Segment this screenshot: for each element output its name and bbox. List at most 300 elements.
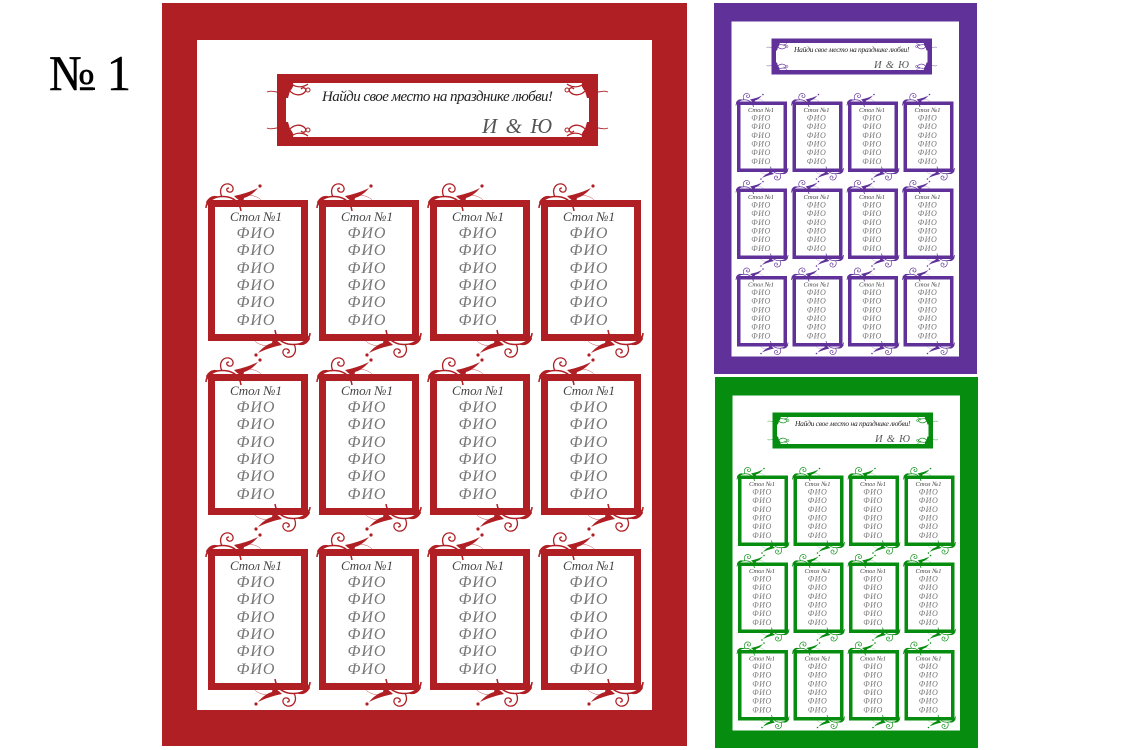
- card: green row 2 table 1: ФИО: [752, 583, 772, 592]
- number label: № 1: [49, 45, 131, 101]
- card: red row 1 table 2: ФИО: [348, 242, 386, 259]
- card: green row 3 table 1: ФИО: [752, 696, 772, 706]
- card: red row 2 table 2: ФИО: [348, 486, 386, 503]
- card: purple row 1 table 3: [847, 93, 899, 180]
- card: purple row 3 table 2: ФИО: [807, 288, 826, 297]
- card: green row 3 table 3: ФИО: [863, 670, 883, 680]
- card: green row 2 table 4: ФИО: [919, 592, 938, 601]
- card: purple row 3 table 4: ФИО: [918, 322, 937, 332]
- card: green row 3 table 4: ФИО: [919, 696, 938, 706]
- card: red row 2 table 3: ФИО: [459, 434, 497, 451]
- card: purple row 1 table 1: ФИО: [751, 122, 771, 131]
- card: purple row 1 table 4: ФИО: [918, 140, 937, 148]
- card: red row 1 table 3: ФИО: [459, 260, 497, 277]
- card: green row 3 table 3: [848, 642, 900, 729]
- banner: red heading: [267, 78, 608, 142]
- banner: purple heading: [766, 41, 937, 72]
- card: purple row 3 table 3: ФИО: [862, 288, 882, 297]
- card: green row 3 table 2: ФИО: [808, 696, 827, 706]
- card: red row 1 table 4: ФИО: [570, 312, 608, 329]
- card: green row 1 table 1: ФИО: [752, 514, 772, 522]
- card: green row 2 table 3: ФИО: [863, 583, 883, 592]
- card: red row 1 table 4: Стол №1: [563, 209, 615, 224]
- card: red row 2 table 3: ФИО: [459, 486, 497, 503]
- card: red row 1 table 1: ФИО: [237, 277, 275, 294]
- card: green row 1 table 3: [848, 467, 900, 554]
- card: red row 1 table 3: ФИО: [459, 312, 497, 329]
- card: purple row 3 table 1: ФИО: [751, 332, 771, 340]
- card: red row 1 table 1: ФИО: [237, 294, 275, 311]
- card: purple row 3 table 2: [792, 268, 844, 355]
- card: purple row 3 table 3: ФИО: [862, 296, 882, 306]
- card: purple row 3 table 3: ФИО: [862, 306, 882, 314]
- card: purple row 3 table 4: ФИО: [918, 288, 937, 297]
- card: purple row 1 table 2: ФИО: [807, 131, 826, 140]
- banner: green heading: [768, 415, 938, 446]
- banner: green heading: И & Ю: [874, 434, 910, 445]
- card: red row 3 table 4: ФИО: [570, 643, 608, 660]
- card: red row 1 table 1: [206, 184, 310, 357]
- card: purple row 1 table 3: ФИО: [862, 114, 882, 122]
- card: green row 1 table 1: [737, 467, 789, 554]
- card: red row 2 table 1: ФИО: [237, 416, 275, 433]
- card: red row 2 table 3: Стол №1: [452, 383, 504, 398]
- card: red row 3 table 3: Стол №1: [452, 558, 504, 573]
- card: red row 3 table 4: ФИО: [570, 626, 608, 643]
- card: purple row 3 table 3: [847, 268, 899, 355]
- card: purple row 3 table 1: ФИО: [751, 314, 771, 323]
- card: green row 2 table 2: ФИО: [808, 618, 827, 627]
- card: green row 2 table 3: ФИО: [863, 618, 883, 627]
- card: green row 1 table 2: ФИО: [808, 496, 827, 505]
- card: green row 3 table 1: ФИО: [752, 662, 772, 671]
- card: red row 3 table 3: ФИО: [459, 661, 497, 678]
- banner: purple heading: И & Ю: [873, 60, 909, 71]
- card: purple row 2 table 4: Стол №1: [914, 194, 941, 201]
- card: purple row 1 table 1: ФИО: [751, 114, 771, 122]
- card: purple row 2 table 1: ФИО: [751, 226, 771, 236]
- card: red row 2 table 2: ФИО: [348, 434, 386, 451]
- card: green row 3 table 2: ФИО: [808, 688, 827, 697]
- card: purple row 2 table 3: ФИО: [862, 218, 882, 227]
- banner: purple heading: Найди свое место на празднике любви!: [793, 45, 910, 54]
- card: green row 3 table 3: ФИО: [863, 662, 883, 671]
- card: green row 1 table 4: ФИО: [919, 514, 938, 522]
- card: green row 1 table 4: ФИО: [919, 496, 938, 505]
- card: green row 3 table 2: ФИО: [808, 662, 827, 671]
- card: purple row 2 table 2: ФИО: [807, 226, 826, 236]
- card: green row 2 table 4: ФИО: [919, 609, 938, 618]
- card: red row 3 table 3: ФИО: [459, 591, 497, 608]
- card: red row 2 table 1: ФИО: [237, 434, 275, 451]
- card: green row 3 table 3: ФИО: [863, 680, 883, 688]
- card: red row 2 table 4: ФИО: [570, 468, 608, 485]
- card: green row 2 table 1: [737, 554, 789, 641]
- card: green row 1 table 1: ФИО: [752, 522, 772, 531]
- banner: green heading: Найди свое место на празднике любви!: [794, 419, 911, 428]
- card: green row 2 table 1: ФИО: [752, 618, 772, 627]
- card: red row 2 table 1: ФИО: [237, 468, 275, 485]
- card: red row 1 table 3: Стол №1: [452, 209, 504, 224]
- card: purple row 3 table 3: Стол №1: [859, 282, 885, 288]
- card: green row 3 table 4: ФИО: [919, 680, 938, 688]
- card: green row 2 table 3: ФИО: [863, 600, 883, 610]
- card: purple row 2 table 2: [792, 180, 844, 267]
- card: green row 3 table 4: ФИО: [919, 662, 938, 671]
- card: green row 2 table 2: ФИО: [808, 609, 827, 618]
- card: green row 2 table 2: [792, 554, 844, 641]
- card: red row 1 table 3: ФИО: [459, 294, 497, 311]
- card: purple row 1 table 2: Стол №1: [803, 107, 830, 114]
- card: green row 1 table 3: ФИО: [863, 531, 883, 540]
- card: red row 3 table 3: ФИО: [459, 609, 497, 626]
- card: red row 1 table 1: Стол №1: [230, 209, 282, 224]
- card: green row 1 table 3: ФИО: [863, 505, 883, 514]
- card: purple row 2 table 2: ФИО: [807, 209, 826, 218]
- card: red row 1 table 1: ФИО: [237, 242, 275, 259]
- card: red row 2 table 3: [428, 358, 532, 531]
- card: green row 2 table 3: ФИО: [863, 592, 883, 601]
- card: red row 3 table 1: Стол №1: [230, 558, 282, 573]
- card: green row 3 table 2: ФИО: [808, 680, 827, 688]
- card: green row 1 table 1: ФИО: [752, 505, 772, 514]
- card: red row 3 table 2: ФИО: [348, 609, 386, 626]
- banner: red heading: И & Ю: [481, 114, 552, 138]
- card: green row 3 table 3: Стол №1: [860, 656, 886, 662]
- card: green row 3 table 2: [792, 642, 844, 729]
- card: purple row 1 table 4: ФИО: [918, 157, 937, 166]
- card: green row 2 table 1: ФИО: [752, 609, 772, 618]
- card: purple row 1 table 4: ФИО: [918, 131, 937, 140]
- card: purple row 2 table 1: ФИО: [751, 200, 771, 210]
- card: green row 3 table 1: [737, 642, 789, 729]
- card: red row 2 table 4: ФИО: [570, 451, 608, 468]
- card: purple row 3 table 3: ФИО: [862, 332, 882, 340]
- card: purple row 1 table 3: ФИО: [862, 140, 882, 148]
- card: purple row 1 table 3: Стол №1: [859, 107, 885, 114]
- card: red row 3 table 4: ФИО: [570, 591, 608, 608]
- card: purple row 1 table 3: ФИО: [862, 122, 882, 131]
- card: red row 3 table 3: ФИО: [459, 643, 497, 660]
- card: red row 2 table 3: ФИО: [459, 451, 497, 468]
- card: purple row 3 table 1: ФИО: [751, 306, 771, 314]
- card: purple row 2 table 2: ФИО: [807, 235, 826, 244]
- card: red row 3 table 2: [317, 533, 421, 706]
- card: red row 3 table 2: Стол №1: [341, 558, 393, 573]
- card: green row 2 table 3: ФИО: [863, 574, 883, 584]
- card: purple row 2 table 1: [736, 180, 788, 267]
- card: red row 3 table 2: ФИО: [348, 643, 386, 660]
- card: green row 1 table 2: ФИО: [808, 531, 827, 540]
- card: green row 1 table 4: ФИО: [919, 505, 938, 514]
- card: green row 2 table 4: ФИО: [919, 583, 938, 592]
- card: purple row 1 table 1: [736, 93, 788, 180]
- card: green row 3 table 4: ФИО: [919, 688, 938, 697]
- card: green row 3 table 3: ФИО: [863, 688, 883, 697]
- card: purple row 3 table 1: ФИО: [751, 322, 771, 332]
- card: purple row 3 table 2: Стол №1: [803, 282, 830, 288]
- card: purple row 2 table 3: Стол №1: [859, 194, 885, 201]
- card: green row 3 table 3: ФИО: [863, 696, 883, 706]
- panel: red seating chart: [162, 3, 687, 746]
- card: purple row 2 table 4: [902, 180, 954, 267]
- card: purple row 2 table 4: ФИО: [918, 235, 937, 244]
- card: green row 1 table 2: ФИО: [808, 514, 827, 522]
- card: purple row 2 table 4: ФИО: [918, 218, 937, 227]
- card: green row 1 table 2: ФИО: [808, 505, 827, 514]
- card: red row 1 table 1: ФИО: [237, 312, 275, 329]
- card: green row 3 table 4: [904, 642, 956, 729]
- card: purple row 2 table 1: ФИО: [751, 218, 771, 227]
- card: green row 1 table 4: ФИО: [919, 522, 938, 531]
- card: green row 2 table 2: Стол №1: [804, 568, 831, 575]
- banner: red heading: Найди свое место на празднике любви!: [321, 89, 553, 105]
- card: red row 2 table 3: ФИО: [459, 416, 497, 433]
- card: green row 2 table 1: ФИО: [752, 574, 772, 584]
- card: purple row 3 table 1: [736, 268, 788, 355]
- card: green row 1 table 3: ФИО: [863, 496, 883, 505]
- card: green row 1 table 2: Стол №1: [804, 481, 831, 488]
- card: red row 1 table 3: [428, 184, 532, 357]
- card: red row 1 table 2: ФИО: [348, 294, 386, 311]
- card: purple row 2 table 3: ФИО: [862, 226, 882, 236]
- card: green row 1 table 4: ФИО: [919, 488, 938, 496]
- card: purple row 1 table 3: ФИО: [862, 148, 882, 157]
- panel: purple seating chart: [714, 3, 977, 374]
- card: red row 3 table 3: ФИО: [459, 626, 497, 643]
- card: red row 3 table 4: Стол №1: [563, 558, 615, 573]
- card: purple row 1 table 2: ФИО: [807, 122, 826, 131]
- card: purple row 2 table 4: ФИО: [918, 200, 937, 210]
- card: green row 2 table 1: ФИО: [752, 592, 772, 601]
- card: green row 2 table 2: ФИО: [808, 583, 827, 592]
- card: purple row 2 table 2: Стол №1: [803, 194, 830, 201]
- card: red row 1 table 2: Стол №1: [341, 209, 393, 224]
- card: red row 3 table 3: ФИО: [459, 574, 497, 591]
- card: green row 2 table 2: ФИО: [808, 574, 827, 584]
- card: purple row 2 table 3: ФИО: [862, 244, 882, 253]
- card: red row 3 table 2: ФИО: [348, 574, 386, 591]
- card: red row 2 table 3: ФИО: [459, 468, 497, 485]
- card: red row 2 table 3: ФИО: [459, 399, 497, 416]
- card: green row 1 table 2: ФИО: [808, 522, 827, 531]
- card: red row 1 table 3: ФИО: [459, 277, 497, 294]
- card: purple row 1 table 2: ФИО: [807, 148, 826, 157]
- card: red row 1 table 2: ФИО: [348, 277, 386, 294]
- card: red row 3 table 2: ФИО: [348, 591, 386, 608]
- card: red row 2 table 1: Стол №1: [230, 383, 282, 398]
- card: purple row 3 table 3: ФИО: [862, 314, 882, 323]
- card: purple row 2 table 1: Стол №1: [748, 194, 774, 201]
- card: green row 1 table 3: Стол №1: [860, 481, 886, 488]
- card: red row 1 table 2: ФИО: [348, 312, 386, 329]
- card: red row 1 table 3: ФИО: [459, 242, 497, 259]
- card: red row 3 table 1: ФИО: [237, 643, 275, 660]
- card: purple row 1 table 4: ФИО: [918, 114, 937, 122]
- card: purple row 1 table 1: ФИО: [751, 157, 771, 166]
- card: green row 2 table 3: ФИО: [863, 609, 883, 618]
- card: red row 3 table 1: [206, 533, 310, 706]
- card: red row 2 table 2: Стол №1: [341, 383, 393, 398]
- card: purple row 2 table 3: ФИО: [862, 235, 882, 244]
- card: red row 3 table 1: ФИО: [237, 661, 275, 678]
- card: green row 2 table 1: ФИО: [752, 600, 772, 610]
- card: red row 1 table 4: ФИО: [570, 277, 608, 294]
- card: green row 1 table 3: ФИО: [863, 488, 883, 496]
- card: purple row 1 table 2: [792, 93, 844, 180]
- card: green row 2 table 2: ФИО: [808, 600, 827, 610]
- card: green row 2 table 3: Стол №1: [860, 568, 886, 575]
- card: green row 1 table 3: ФИО: [863, 514, 883, 522]
- card: green row 2 table 1: Стол №1: [749, 568, 775, 575]
- card: red row 1 table 3: ФИО: [459, 225, 497, 242]
- card: purple row 2 table 2: ФИО: [807, 218, 826, 227]
- card: purple row 2 table 2: ФИО: [807, 244, 826, 253]
- card: red row 1 table 1: ФИО: [237, 260, 275, 277]
- card: green row 3 table 4: ФИО: [919, 670, 938, 680]
- card: red row 3 table 2: ФИО: [348, 626, 386, 643]
- card: red row 1 table 1: ФИО: [237, 225, 275, 242]
- card: red row 1 table 4: ФИО: [570, 294, 608, 311]
- card: purple row 3 table 2: ФИО: [807, 314, 826, 323]
- card: purple row 3 table 3: ФИО: [862, 322, 882, 332]
- card: green row 2 table 4: ФИО: [919, 600, 938, 610]
- card: purple row 3 table 1: ФИО: [751, 288, 771, 297]
- card: red row 3 table 4: ФИО: [570, 609, 608, 626]
- card: purple row 1 table 2: ФИО: [807, 157, 826, 166]
- card: red row 3 table 4: [539, 533, 643, 706]
- card: red row 1 table 4: ФИО: [570, 242, 608, 259]
- card: red row 2 table 4: ФИО: [570, 399, 608, 416]
- card: red row 3 table 3: [428, 533, 532, 706]
- panel: green seating chart: [715, 377, 978, 748]
- card: red row 2 table 2: ФИО: [348, 451, 386, 468]
- card: green row 3 table 1: Стол №1: [749, 656, 775, 662]
- card: purple row 3 table 4: [902, 268, 954, 355]
- card: purple row 3 table 4: ФИО: [918, 296, 937, 306]
- card: purple row 1 table 4: ФИО: [918, 148, 937, 157]
- card: green row 2 table 4: ФИО: [919, 618, 938, 627]
- card: purple row 2 table 1: ФИО: [751, 209, 771, 218]
- card: purple row 1 table 4: [902, 93, 954, 180]
- card: green row 1 table 1: ФИО: [752, 496, 772, 505]
- card: purple row 2 table 4: ФИО: [918, 226, 937, 236]
- card: green row 3 table 1: ФИО: [752, 706, 772, 714]
- card: green row 3 table 4: ФИО: [919, 706, 938, 714]
- card: green row 2 table 3: [848, 554, 900, 641]
- card: purple row 3 table 1: Стол №1: [748, 282, 774, 288]
- card: green row 3 table 2: ФИО: [808, 670, 827, 680]
- card: purple row 3 table 4: ФИО: [918, 332, 937, 340]
- card: green row 3 table 1: ФИО: [752, 680, 772, 688]
- card: red row 2 table 4: [539, 358, 643, 531]
- card: red row 2 table 1: [206, 358, 310, 531]
- card: purple row 1 table 4: ФИО: [918, 122, 937, 131]
- card: green row 2 table 4: ФИО: [919, 574, 938, 584]
- card: purple row 2 table 1: ФИО: [751, 244, 771, 253]
- card: purple row 2 table 3: ФИО: [862, 209, 882, 218]
- card: green row 1 table 3: ФИО: [863, 522, 883, 531]
- card: red row 3 table 1: ФИО: [237, 609, 275, 626]
- card: purple row 1 table 1: Стол №1: [748, 107, 774, 114]
- card: purple row 1 table 1: ФИО: [751, 131, 771, 140]
- card: purple row 1 table 4: Стол №1: [914, 107, 941, 114]
- card: red row 3 table 4: ФИО: [570, 661, 608, 678]
- card: red row 3 table 4: ФИО: [570, 574, 608, 591]
- card: green row 1 table 1: Стол №1: [749, 481, 775, 488]
- card: purple row 2 table 3: ФИО: [862, 200, 882, 210]
- card: green row 3 table 4: Стол №1: [915, 656, 942, 662]
- card: purple row 3 table 2: ФИО: [807, 296, 826, 306]
- card: purple row 2 table 2: ФИО: [807, 200, 826, 210]
- card: purple row 3 table 4: ФИО: [918, 314, 937, 323]
- card: red row 1 table 2: ФИО: [348, 225, 386, 242]
- card: red row 2 table 2: ФИО: [348, 468, 386, 485]
- card: green row 1 table 1: ФИО: [752, 531, 772, 540]
- card: red row 2 table 2: [317, 358, 421, 531]
- card: red row 3 table 2: ФИО: [348, 661, 386, 678]
- card: green row 1 table 2: ФИО: [808, 488, 827, 496]
- card: red row 3 table 1: ФИО: [237, 626, 275, 643]
- card: purple row 3 table 4: ФИО: [918, 306, 937, 314]
- card: red row 3 table 1: ФИО: [237, 591, 275, 608]
- card: red row 1 table 2: ФИО: [348, 260, 386, 277]
- card: purple row 3 table 4: Стол №1: [914, 282, 941, 288]
- card: purple row 3 table 2: ФИО: [807, 332, 826, 340]
- card: red row 2 table 4: ФИО: [570, 486, 608, 503]
- card: green row 1 table 2: [792, 467, 844, 554]
- card: green row 1 table 4: ФИО: [919, 531, 938, 540]
- card: purple row 1 table 3: ФИО: [862, 131, 882, 140]
- card: green row 3 table 1: ФИО: [752, 670, 772, 680]
- card: purple row 3 table 1: ФИО: [751, 296, 771, 306]
- card: purple row 1 table 2: ФИО: [807, 140, 826, 148]
- card: red row 2 table 4: Стол №1: [563, 383, 615, 398]
- card: purple row 1 table 1: ФИО: [751, 140, 771, 148]
- card: red row 2 table 4: ФИО: [570, 416, 608, 433]
- card: purple row 2 table 4: ФИО: [918, 209, 937, 218]
- card: red row 2 table 1: ФИО: [237, 399, 275, 416]
- card: red row 1 table 4: ФИО: [570, 260, 608, 277]
- card: green row 3 table 1: ФИО: [752, 688, 772, 697]
- card: purple row 3 table 2: ФИО: [807, 306, 826, 314]
- card: purple row 1 table 2: ФИО: [807, 114, 826, 122]
- card: green row 3 table 2: Стол №1: [804, 656, 831, 662]
- card: red row 1 table 4: ФИО: [570, 225, 608, 242]
- card: purple row 3 table 2: ФИО: [807, 322, 826, 332]
- card: purple row 2 table 3: [847, 180, 899, 267]
- card: green row 2 table 4: [904, 554, 956, 641]
- card: purple row 2 table 4: ФИО: [918, 244, 937, 253]
- card: purple row 2 table 1: ФИО: [751, 235, 771, 244]
- card: red row 2 table 4: ФИО: [570, 434, 608, 451]
- card: green row 2 table 4: Стол №1: [915, 568, 942, 575]
- card: purple row 1 table 1: ФИО: [751, 148, 771, 157]
- card: green row 1 table 1: ФИО: [752, 488, 772, 496]
- card: red row 2 table 2: ФИО: [348, 399, 386, 416]
- card: green row 2 table 2: ФИО: [808, 592, 827, 601]
- card: green row 3 table 2: ФИО: [808, 706, 827, 714]
- card: red row 1 table 2: [317, 184, 421, 357]
- card: purple row 1 table 3: ФИО: [862, 157, 882, 166]
- card: red row 3 table 1: ФИО: [237, 574, 275, 591]
- card: red row 2 table 1: ФИО: [237, 451, 275, 468]
- card: red row 2 table 1: ФИО: [237, 486, 275, 503]
- card: red row 2 table 2: ФИО: [348, 416, 386, 433]
- card: green row 1 table 4: [904, 467, 956, 554]
- card: red row 1 table 4: [539, 184, 643, 357]
- card: green row 3 table 3: ФИО: [863, 706, 883, 714]
